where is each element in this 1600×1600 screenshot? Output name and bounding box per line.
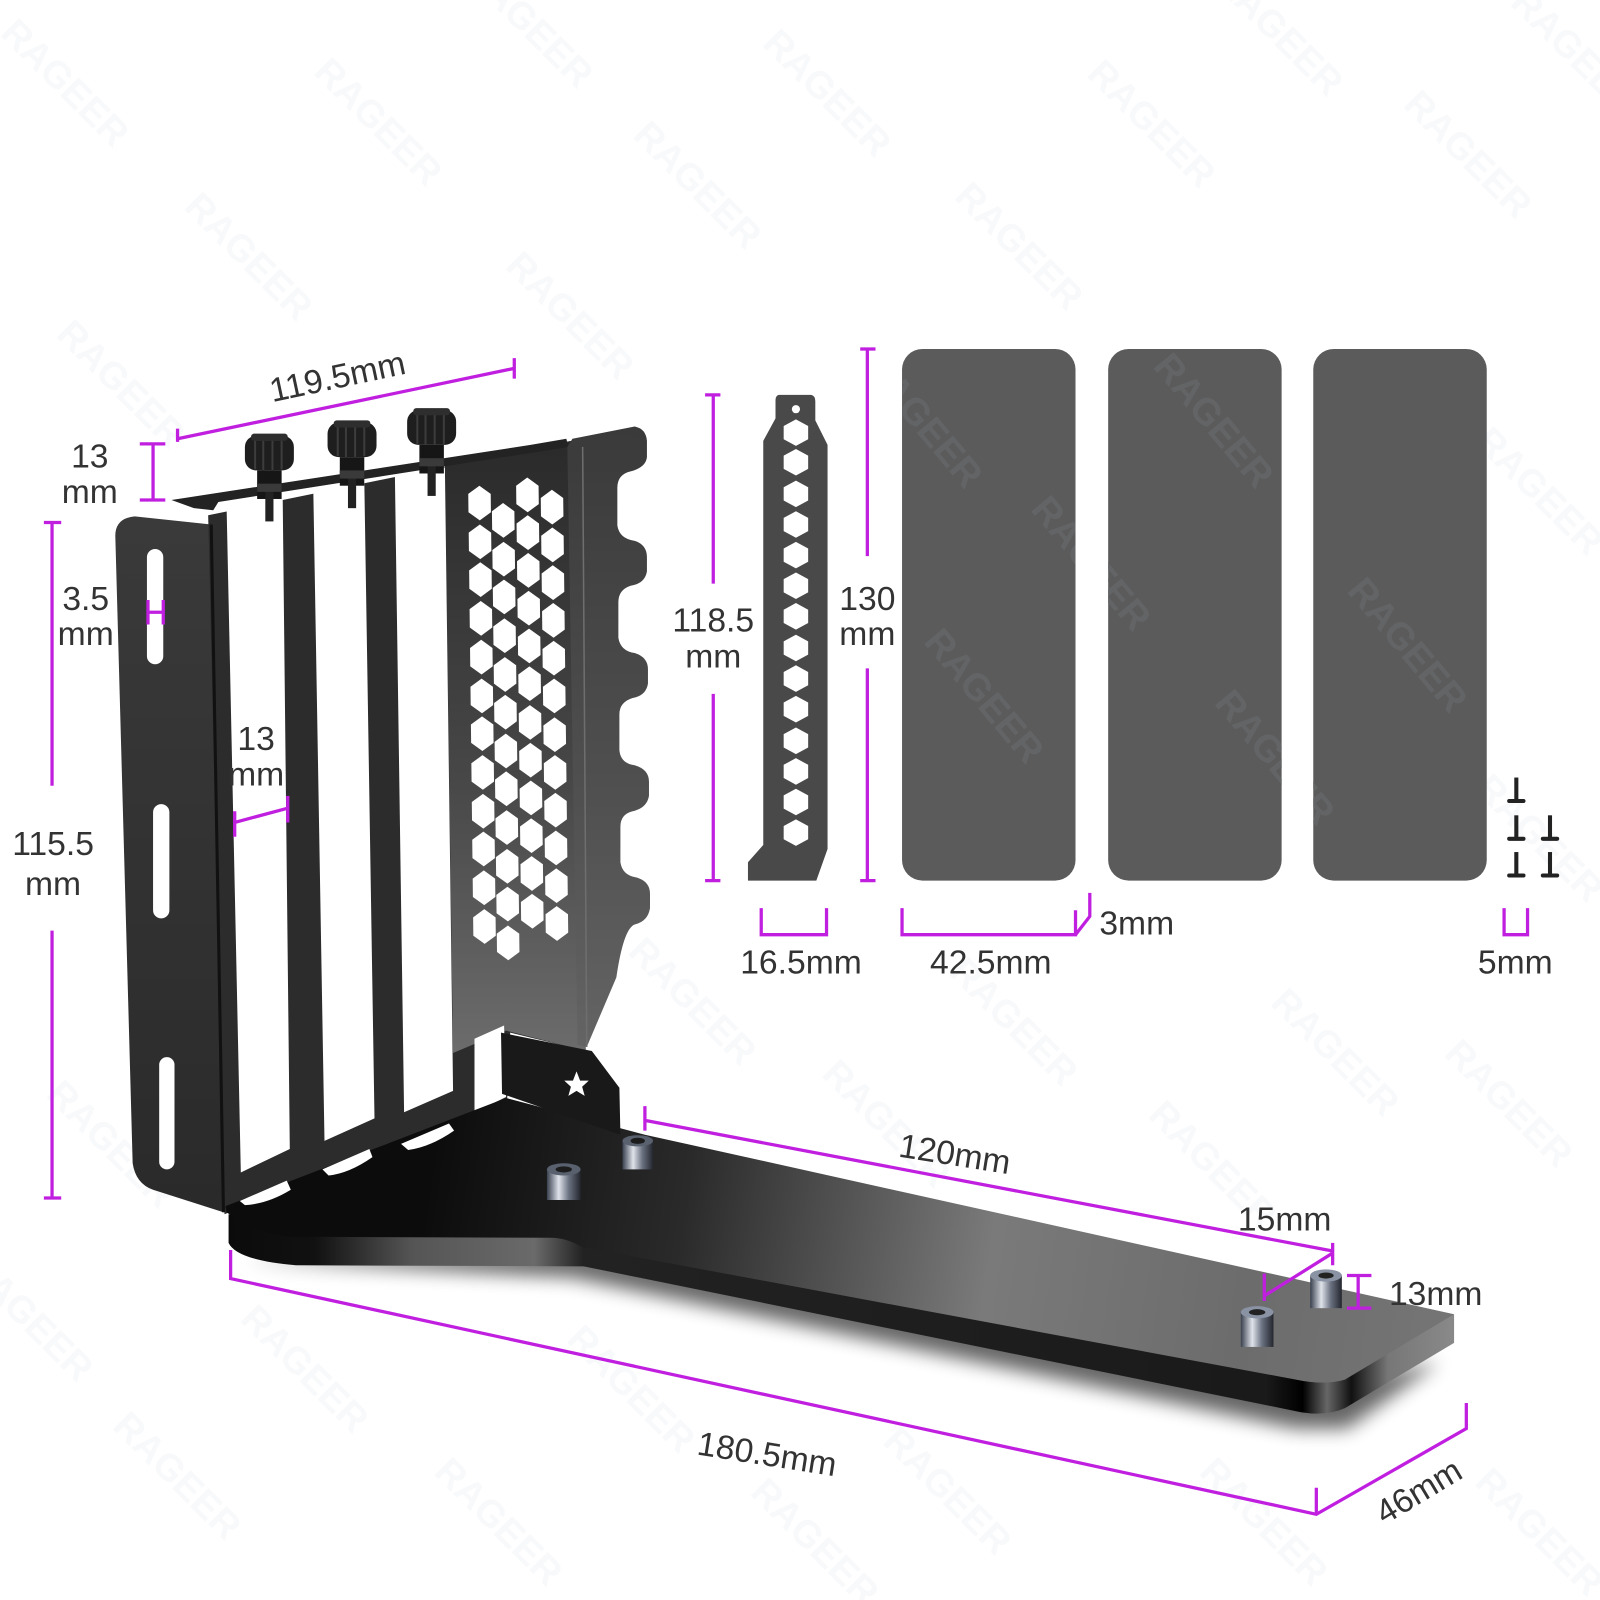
watermarks: RAGEER <box>815 1052 959 1195</box>
watermarks: RAGEER <box>1141 1092 1285 1236</box>
notched right bracket <box>567 427 650 1047</box>
honeycomb vent <box>468 478 569 960</box>
watermarks: RAGEER <box>942 949 1086 1093</box>
watermarks: RAGEER <box>626 113 770 257</box>
screws <box>1507 778 1559 878</box>
upright plate with slots <box>208 441 586 1214</box>
PCI slot cover <box>748 395 828 881</box>
watermarks: RAGEER <box>1192 1449 1336 1593</box>
dimension labels: mm <box>62 474 118 511</box>
base slot cutouts <box>240 1123 454 1205</box>
dimension labels: 13 <box>71 438 109 475</box>
base side edge <box>229 1214 1454 1414</box>
watermarks: RAGEER <box>560 1317 704 1461</box>
watermarks: RAGEER <box>177 184 321 328</box>
watermarks: RAGEER <box>307 49 451 193</box>
watermarks: RAGEER <box>1437 1031 1581 1175</box>
pad watermarks: RAGEER <box>1024 488 1160 638</box>
pad watermarks: RAGEER <box>916 620 1052 771</box>
thermal pads <box>902 349 1487 881</box>
dimension labels: mm <box>839 616 895 653</box>
dimension labels: 13mm <box>1389 1276 1482 1313</box>
dimension labels: 120mm <box>896 1128 1013 1182</box>
infographic: bracket dimensions <box>14 347 1560 1520</box>
watermarks: RAGEER <box>876 1419 1020 1563</box>
dimension labels: 5mm <box>1478 944 1553 981</box>
watermarks: RAGEER <box>233 1296 377 1440</box>
dimension labels <box>12 345 1553 1532</box>
thumbscrews <box>245 408 456 521</box>
dimension labels: 13 <box>237 721 275 758</box>
watermarks: RAGEER <box>621 929 765 1073</box>
fold line <box>211 524 223 1212</box>
plate slots <box>227 467 506 1172</box>
vented panel <box>445 441 586 1053</box>
dimension labels: 16.5mm <box>740 944 862 981</box>
watermarks: RAGEER <box>1396 82 1540 226</box>
base shadow <box>245 1250 1439 1429</box>
dimension labels: mm <box>685 638 741 675</box>
dimension labels: mm <box>25 866 81 903</box>
dimension lines <box>44 349 1528 1514</box>
pad watermarks: RAGEER <box>1207 682 1343 832</box>
watermarks: RAGEER <box>498 243 642 387</box>
flange slots <box>147 549 174 1169</box>
watermarks: RAGEER <box>49 312 193 456</box>
dimension labels: mm <box>58 616 114 653</box>
watermarks: RAGEER <box>1264 980 1408 1124</box>
watermarks: RAGEER <box>106 1404 250 1547</box>
watermarks: RAGEER <box>427 1449 571 1593</box>
icon: star <box>564 1071 589 1096</box>
pad watermarks: RAGEER <box>1340 569 1476 720</box>
dimension labels: 115.5 <box>12 826 94 863</box>
standoffs <box>547 1135 1342 1347</box>
top shelf <box>171 439 568 510</box>
dimension labels: mm <box>228 757 284 794</box>
watermarks: RAGEER <box>1080 52 1224 195</box>
pad watermarks: RAGEER <box>1146 345 1282 496</box>
dimension labels: 46mm <box>1369 1452 1469 1532</box>
watermarks: RAGEER <box>756 21 900 165</box>
base top surface <box>226 1098 1454 1383</box>
dimension labels: 130 <box>839 581 895 618</box>
pad watermarks <box>855 345 1476 832</box>
dimension labels: 3mm <box>1099 906 1174 943</box>
bracket fold line <box>583 447 587 1047</box>
main bracket <box>115 408 1454 1429</box>
dimension labels: 3.5 <box>62 581 109 618</box>
dimension labels: 15mm <box>1238 1202 1331 1239</box>
dimension labels: 42.5mm <box>930 944 1052 981</box>
dimension labels: 119.5mm <box>266 345 409 410</box>
dimension labels: 118.5 <box>672 603 754 640</box>
dimension labels: 180.5mm <box>695 1426 839 1484</box>
pad watermarks: RAGEER <box>855 345 991 496</box>
watermarks: RAGEER <box>39 1072 183 1216</box>
watermarks: RAGEER <box>947 174 1091 318</box>
left flange <box>115 516 223 1212</box>
corner gusset with star <box>501 1033 620 1135</box>
